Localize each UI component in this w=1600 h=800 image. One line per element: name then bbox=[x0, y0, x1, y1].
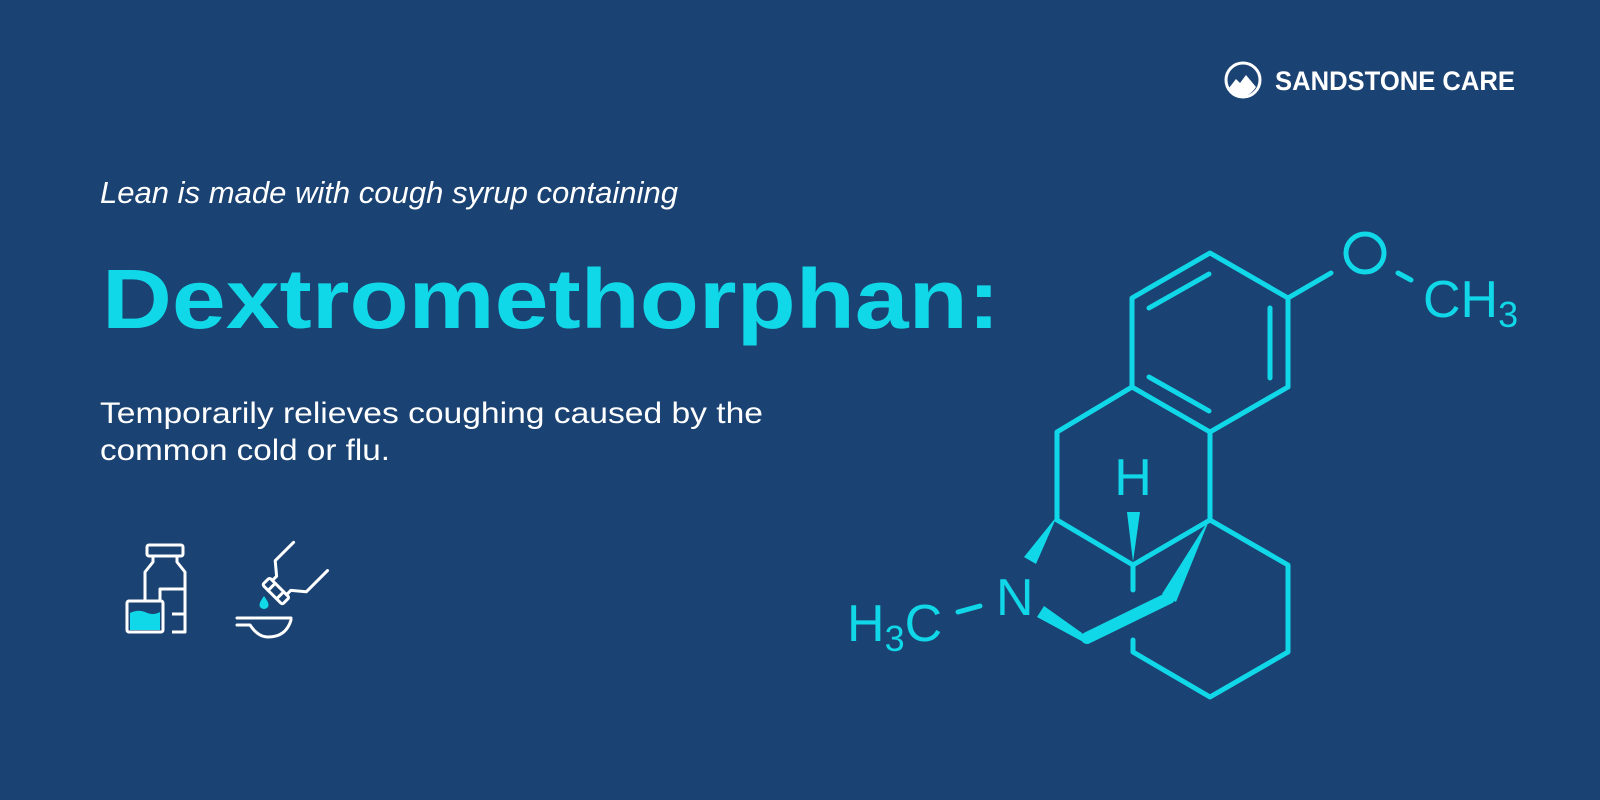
logo: Sandstone Care bbox=[1226, 63, 1515, 97]
middle ring and bridges bbox=[1024, 387, 1210, 590]
methoxy group bbox=[1288, 234, 1518, 335]
lower ring bbox=[1037, 518, 1288, 697]
icon: syrup bottle and glass bbox=[127, 545, 185, 632]
icon: logo circle bbox=[1226, 63, 1260, 97]
N-methyl group: 3 bbox=[885, 618, 905, 659]
description text: Temporarily relieves coughing caused by the bbox=[100, 397, 763, 430]
N-methyl group: C bbox=[905, 595, 942, 653]
icon: pouring bottle, drop and spoon bbox=[237, 539, 328, 637]
description text bbox=[100, 397, 763, 467]
N-methyl group bbox=[847, 569, 1034, 659]
methoxy group: CH bbox=[1423, 271, 1498, 329]
middle ring and bridges: H bbox=[1114, 449, 1152, 507]
N-methyl group: N bbox=[996, 569, 1034, 627]
methoxy group: 3 bbox=[1498, 294, 1518, 335]
description text: common cold or flu. bbox=[100, 434, 390, 467]
aromatic ring bbox=[1132, 253, 1288, 432]
chart: dextromethorphan molecule bbox=[847, 234, 1518, 697]
N-methyl group: H bbox=[847, 595, 885, 653]
title: Dextromethorphan: bbox=[102, 252, 1000, 346]
logo text: SANDSTONE CARE bbox=[1275, 66, 1515, 96]
intro italic text: Lean is made with cough syrup containing bbox=[100, 175, 678, 210]
